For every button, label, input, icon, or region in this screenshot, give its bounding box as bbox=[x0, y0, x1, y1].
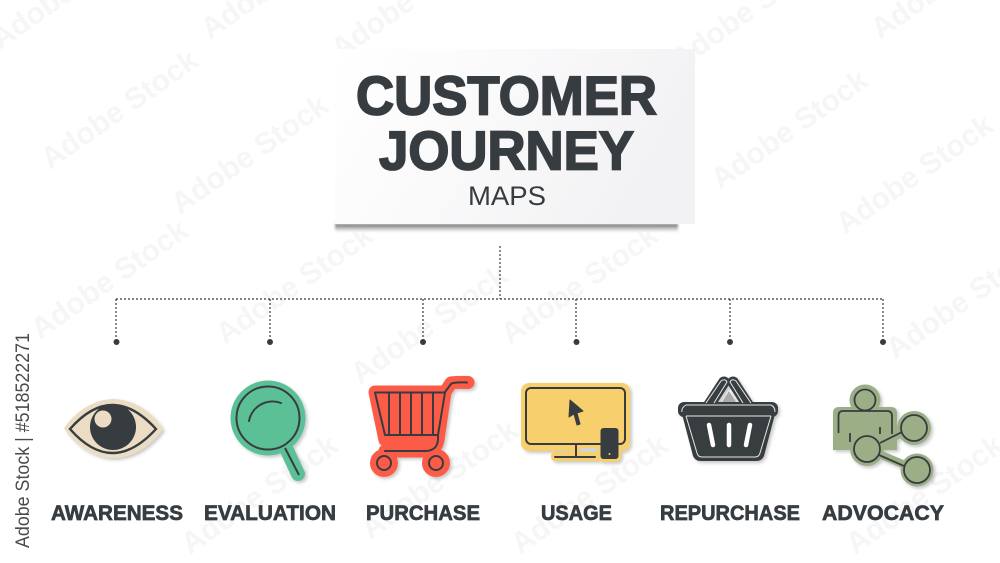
stage labels: PURCHASE bbox=[366, 502, 480, 525]
stage labels bbox=[51, 502, 944, 525]
card shadow bbox=[335, 224, 678, 232]
cursor bbox=[569, 400, 583, 425]
stage labels: ADVOCACY bbox=[822, 502, 944, 525]
watermark pattern: Adobe Stock bbox=[505, 428, 674, 561]
side credit text: Adobe Stock | #518522271 bbox=[13, 333, 34, 548]
subtitle: maps: MAPS bbox=[468, 181, 546, 211]
title: customer journey bbox=[356, 64, 657, 182]
watermark pattern: Adobe Stock bbox=[210, 218, 379, 351]
watermark pattern: Adobe Stock bbox=[495, 218, 664, 351]
title: customer journey: CUSTOMER bbox=[356, 64, 657, 126]
icon: magnifying glass bbox=[230, 380, 306, 475]
watermark pattern: Adobe Stock bbox=[35, 43, 204, 176]
stage labels: USAGE bbox=[541, 502, 612, 525]
icon: shopping cart bbox=[371, 382, 468, 476]
stage labels: EVALUATION bbox=[204, 502, 336, 525]
icon: person with share network bbox=[833, 384, 934, 486]
watermark pattern: Adobe Stock bbox=[25, 213, 194, 346]
watermark pattern: Adobe Stock bbox=[705, 63, 874, 196]
card panel bbox=[335, 49, 695, 224]
watermark pattern: Adobe Stock bbox=[165, 88, 334, 221]
title: customer journey: JOURNEY bbox=[379, 120, 634, 182]
watermark pattern: Adobe Stock bbox=[175, 428, 344, 561]
icon: monitor bbox=[521, 383, 630, 462]
icon: eye bbox=[64, 399, 163, 458]
watermark pattern: Adobe Stock bbox=[355, 413, 524, 546]
title card bbox=[335, 49, 695, 232]
connector tree bbox=[114, 246, 886, 345]
watermark pattern: Adobe Stock bbox=[345, 258, 514, 391]
icon: shopping basket bbox=[678, 378, 778, 461]
watermark pattern: Adobe Stock bbox=[830, 108, 999, 241]
stage labels: AWARENESS bbox=[51, 502, 183, 525]
phone bbox=[600, 428, 618, 459]
stage labels: REPURCHASE bbox=[660, 502, 800, 525]
